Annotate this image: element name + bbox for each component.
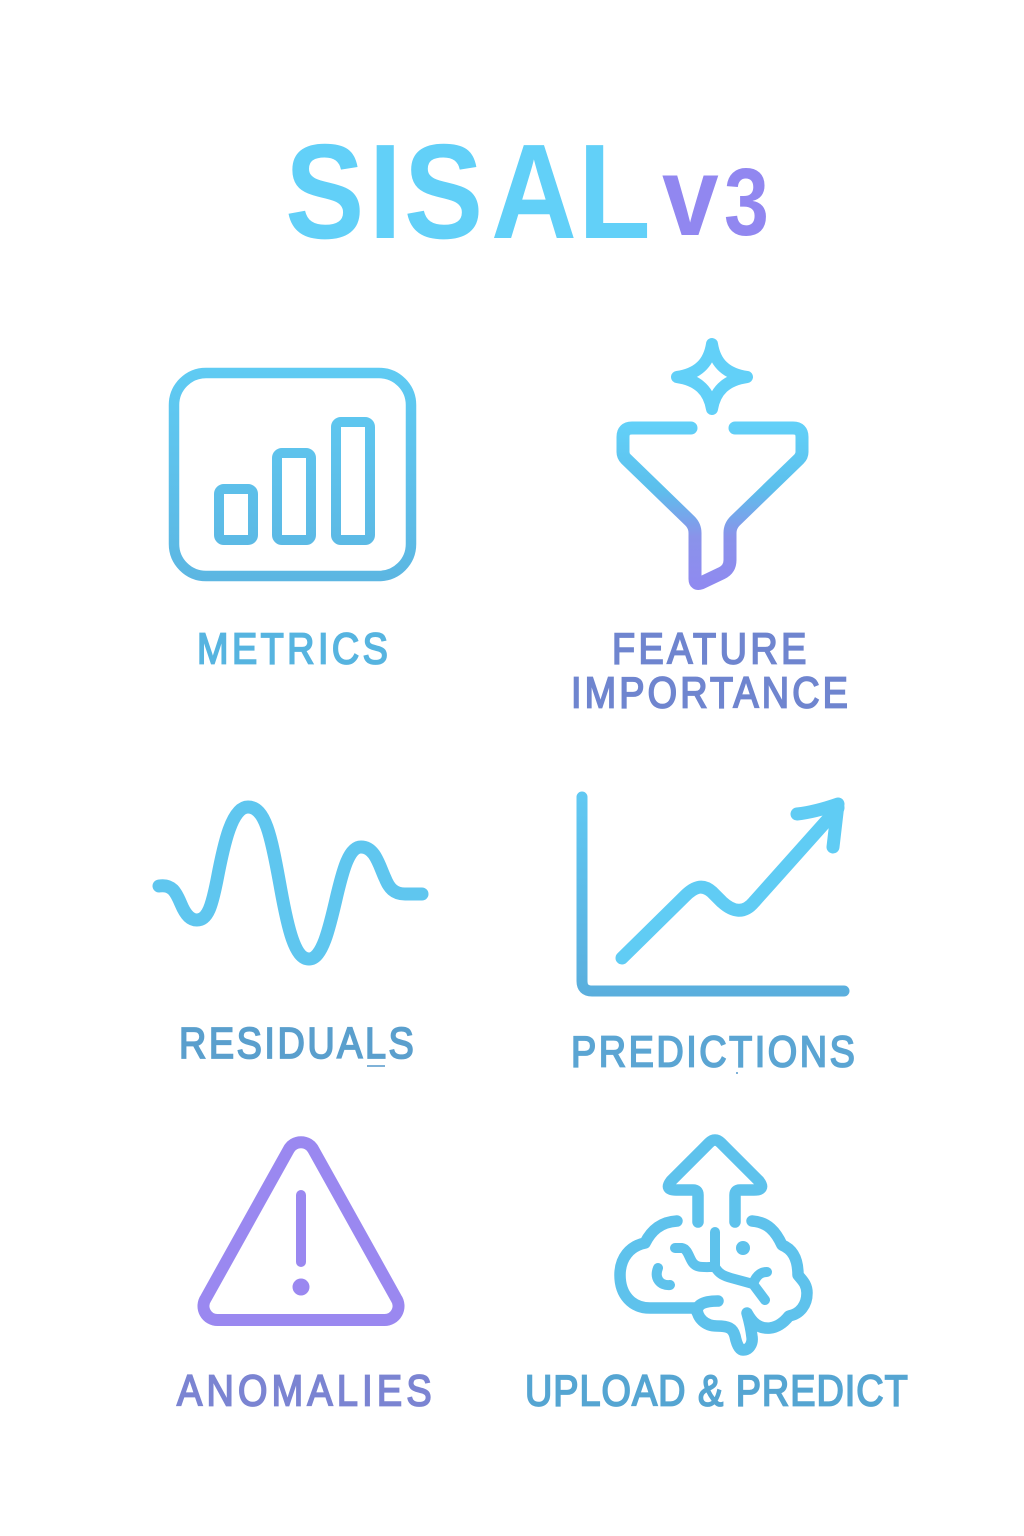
panel: residuals	[159, 807, 422, 1068]
icon: warning triangle	[203, 1142, 399, 1320]
icon: funnel with sparkle	[623, 344, 802, 584]
panel: metrics	[174, 373, 411, 673]
panel: feature importance	[571, 344, 848, 717]
title: v	[662, 134, 719, 259]
panel: anomalies	[177, 1142, 432, 1415]
title: 3	[724, 148, 769, 256]
icon: residual wave	[159, 807, 422, 959]
label: predictions: PREDICTIONS	[571, 1027, 855, 1076]
label: feature importance: FEATURE	[612, 624, 806, 673]
label: metrics: METRICS	[197, 624, 388, 673]
icon: brain with upload arrow	[620, 1140, 807, 1350]
label: upload and predict: UPLOAD & PREDICT	[525, 1366, 908, 1415]
title: SISAL	[285, 116, 651, 267]
panel: predictions	[571, 797, 855, 1076]
panel: upload and predict	[525, 1140, 908, 1415]
icon: rising line chart	[582, 797, 844, 991]
icon: bar chart in rounded frame	[174, 373, 411, 576]
label: anomalies: ANOMALIES	[177, 1366, 432, 1415]
label: feature importance	[571, 624, 848, 717]
label: feature importance: IMPORTANCE	[571, 668, 848, 717]
label: residuals: RESIDUALS	[179, 1018, 414, 1068]
